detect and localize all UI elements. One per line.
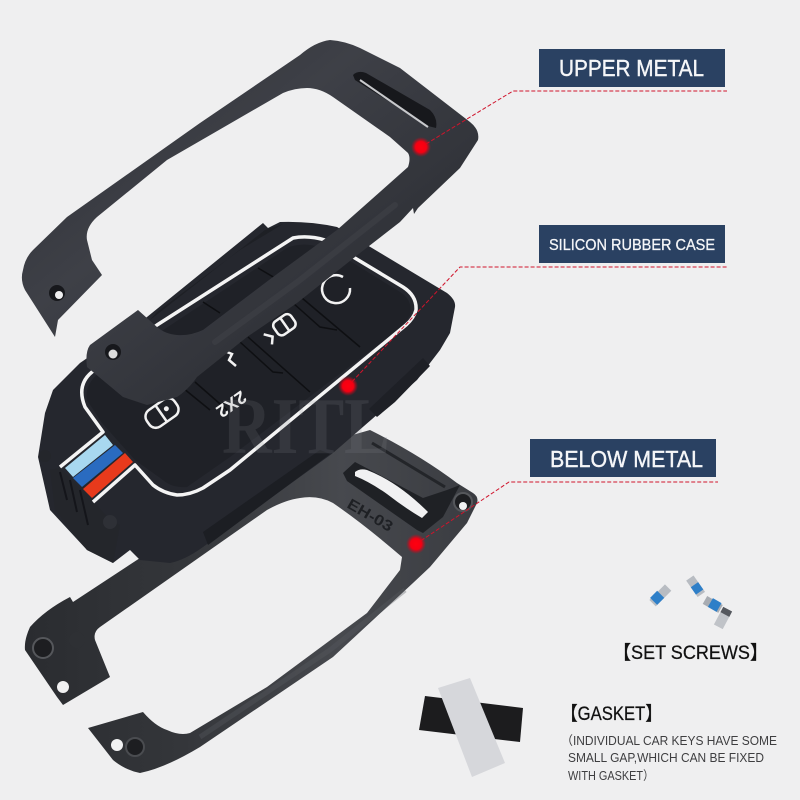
icon: gasket strips [419, 678, 523, 777]
callout line: below metal [416, 482, 718, 544]
ribbed end cap [50, 468, 120, 563]
button panel [87, 245, 411, 487]
lower band highlight [200, 590, 405, 737]
slot opening [355, 469, 428, 518]
label: upper metal: UPPER METAL [559, 55, 704, 81]
text block: gasket note [561, 734, 777, 783]
marker dot: silicon rubber case [338, 376, 358, 396]
below metal frame [25, 430, 477, 773]
white outline loop [60, 237, 416, 502]
text block: gasket note: SMALL GAP,WHICH CAN BE FIXED [568, 751, 764, 765]
bar highlight [215, 205, 395, 342]
icon: C button [322, 275, 350, 303]
text block: gasket note: WITH GASKET） [568, 769, 654, 783]
case side grip right [369, 358, 430, 417]
embossed model mark: EH-03 [344, 496, 396, 535]
inner ledge [150, 224, 283, 320]
watermark: RITL [222, 383, 390, 471]
icon: truck glyph [222, 350, 236, 366]
label: below metal: BELOW METAL [550, 446, 703, 472]
icon: unlock button [142, 395, 182, 431]
icon: lock button [261, 312, 298, 345]
slot [353, 72, 436, 128]
heading: set screws: 【SET SCREWS】 [613, 642, 768, 664]
label: silicon rubber case [539, 225, 725, 263]
top ridge [372, 443, 445, 487]
case side grip lower [203, 450, 330, 545]
label: silicon rubber case: SILICON RUBBER CASE [549, 237, 715, 254]
callout line: upper metal [421, 91, 727, 147]
text block: gasket note: （INDIVIDUAL CAR KEYS HAVE SOME [561, 734, 777, 748]
silicon rubber case [38, 222, 455, 563]
slot frame [343, 462, 460, 533]
icon: 2x2 drive button: 2X2 [212, 387, 250, 421]
label: upper metal [539, 49, 725, 87]
icon: set screws [649, 576, 732, 629]
marker dot: upper metal [411, 137, 431, 157]
end cap bumps [39, 450, 51, 462]
upper metal frame [22, 40, 478, 405]
colour stripes [65, 435, 133, 498]
callout line: silicon rubber case [348, 267, 727, 386]
end cap ribs [60, 472, 88, 525]
heading: gasket: 【GASKET】 [561, 703, 662, 725]
marker dot: below metal [406, 534, 426, 554]
label: below metal [530, 439, 716, 477]
button dividers [183, 268, 360, 410]
